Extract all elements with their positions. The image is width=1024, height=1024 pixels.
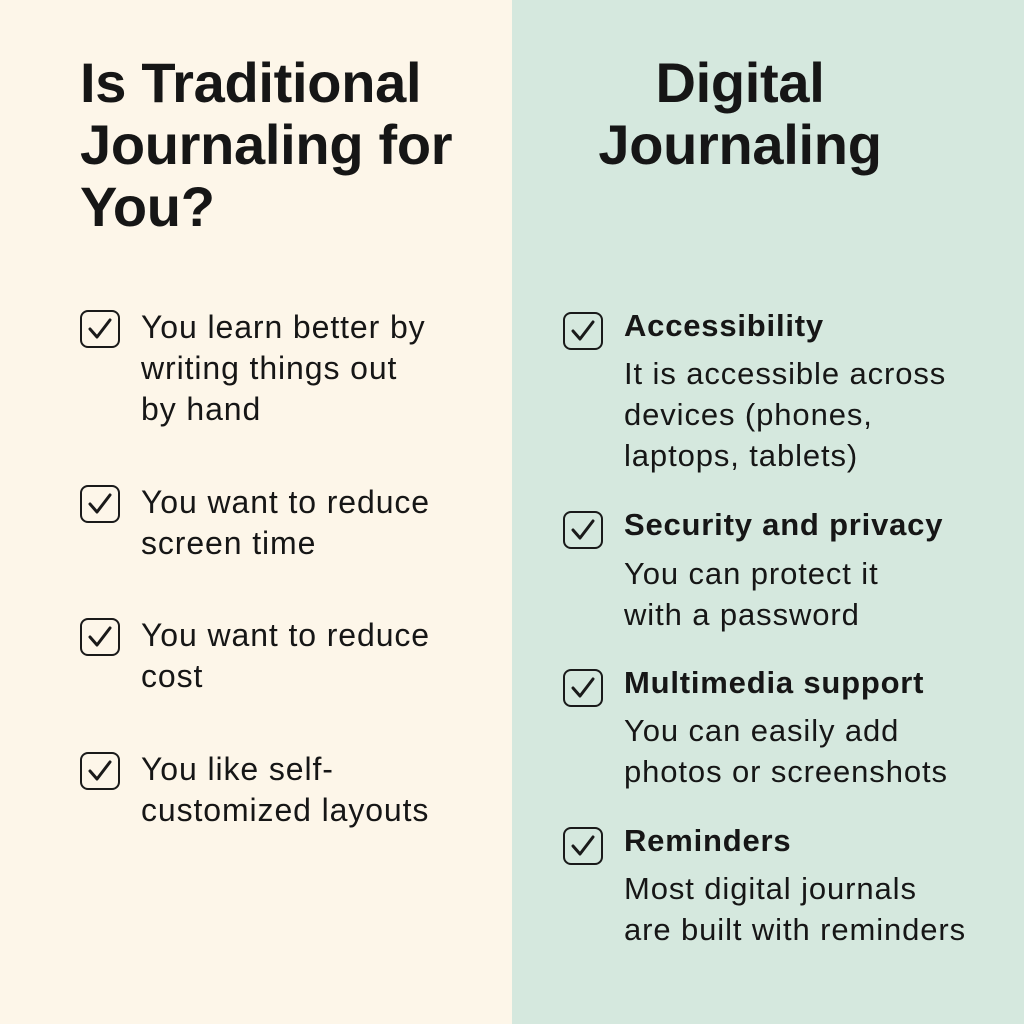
text: You want to reduce [141, 484, 430, 520]
title: digital: Journaling [598, 113, 882, 176]
icon: checkbox [80, 752, 120, 790]
title: traditional: You? [80, 175, 215, 238]
icon: checkbox [563, 827, 603, 865]
item: multimedia: You can easily add [624, 713, 899, 748]
icon: checkbox [563, 511, 603, 549]
text: You like self- [141, 751, 334, 787]
text: by hand [141, 391, 261, 427]
item: accessibility: devices (phones, [624, 397, 873, 432]
title: traditional: Journaling for [80, 113, 452, 176]
text: Multimedia support [624, 665, 924, 700]
item: multimedia [563, 665, 948, 789]
item: cost [80, 617, 430, 694]
title: traditional [80, 51, 452, 238]
icon: checkbox [80, 310, 120, 348]
item: accessibility [563, 308, 946, 473]
item: multimedia: photos or screenshots [624, 754, 948, 789]
icon: checkbox [80, 618, 120, 656]
item: security: with a password [624, 597, 860, 632]
item: reminders: Most digital journals [624, 871, 917, 906]
item: reminders [563, 823, 966, 947]
text [141, 309, 426, 427]
text: writing things out [141, 350, 397, 386]
item: learn by hand [80, 309, 426, 427]
text [141, 484, 430, 561]
item: accessibility: It is accessible across [624, 356, 946, 391]
text: Reminders [624, 823, 791, 858]
title: traditional: Is Traditional [80, 51, 421, 114]
item: accessibility: laptops, tablets) [624, 438, 858, 473]
item: screen time [80, 484, 430, 561]
text: You learn better by [141, 309, 426, 345]
icon: checkbox [563, 312, 603, 350]
text: cost [141, 658, 203, 694]
text [141, 751, 429, 828]
title: digital [598, 51, 882, 176]
panel: traditional [0, 0, 512, 1024]
text: You want to reduce [141, 617, 430, 653]
item: layouts [80, 751, 429, 828]
item: reminders: are built with reminders [624, 912, 966, 947]
icon: checkbox [80, 485, 120, 523]
text: Security and privacy [624, 507, 943, 542]
text: Accessibility [624, 308, 824, 343]
text [141, 617, 430, 694]
text: screen time [141, 525, 316, 561]
text: customized layouts [141, 792, 429, 828]
title: digital: Digital [655, 51, 825, 114]
icon: checkbox [563, 669, 603, 707]
item: security [563, 507, 943, 632]
panel: digital [512, 0, 1024, 1024]
item: security: You can protect it [624, 556, 879, 591]
